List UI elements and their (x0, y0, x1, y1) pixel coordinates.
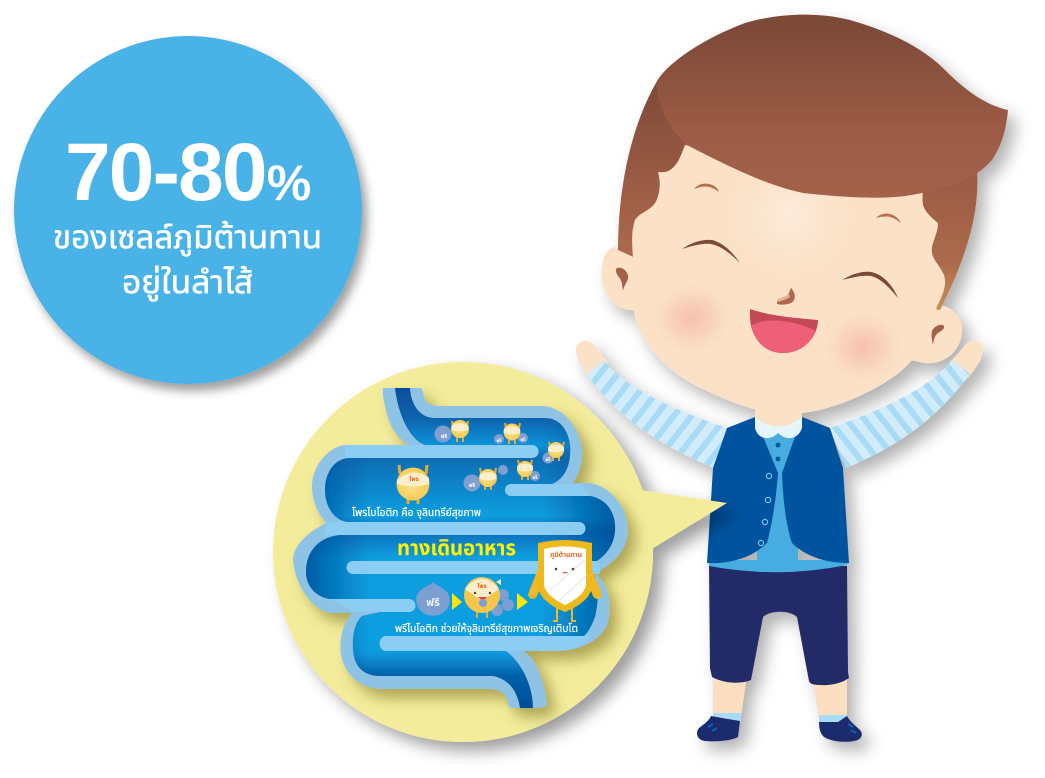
cheeks (650, 280, 905, 385)
shorts (709, 566, 849, 685)
neck (755, 405, 802, 426)
caption: prebiotic: พรีไบโอติก ช่วยให้จุลินทรีย์สุขภาพเจริญเติบโต (395, 622, 578, 635)
probiotic bug small 3 (548, 442, 564, 461)
statistic caption: ของเซลล์ภูมิต้านทาน (53, 219, 322, 257)
prebiotic ball labels: ฟรี (469, 482, 475, 489)
prebiotic ball labels: ฟรี (533, 475, 538, 480)
buttons (758, 473, 772, 546)
eyebrows (694, 184, 901, 223)
ear details (616, 268, 944, 345)
front hair (656, 15, 1008, 198)
large probiotic bug: โพร (409, 477, 419, 483)
collar (755, 417, 802, 438)
probiotic bug small 1 (451, 420, 469, 442)
prebiotic balls (434, 426, 554, 492)
nose (777, 288, 795, 305)
caption: probiotic: โพรไบโอติก คือ จุลินทรีย์สุขภาพ (352, 507, 481, 519)
prebiotic ball labels: ฟรี (497, 438, 502, 443)
immune shield character: ภูมิต้านทาน (550, 551, 582, 559)
probiotic and prebiotic characters, upper rows (396, 420, 564, 504)
prebiotic ball labels: ฟรี (546, 457, 551, 462)
shirt buttons (776, 443, 780, 461)
statistic caption (53, 219, 322, 302)
probiotic bug small 4 (517, 460, 533, 480)
speech bubble (273, 362, 727, 742)
right arm (830, 341, 983, 468)
statistic caption: อยู่ในลำไส้ (122, 264, 253, 302)
probiotic eating prebiotic (464, 577, 514, 618)
large prebiotic ball: ฟรี (426, 597, 440, 609)
probiotic bug small 5 (479, 468, 497, 490)
heading: digestive tract: ทางเดินอาหาร (397, 537, 516, 560)
boy character (576, 15, 1008, 742)
intestine diagram (293, 388, 628, 708)
left shoe (697, 716, 740, 741)
waistcoat (707, 417, 849, 563)
prebiotic ball labels: ฟรี (441, 433, 447, 440)
immune shield character (528, 540, 602, 621)
left arm (576, 341, 727, 468)
arrow (517, 593, 528, 610)
statistic 70-80%: 70-80% (65, 127, 311, 218)
prebiotic ball labels: ฟรี (521, 437, 526, 442)
prebiotic ball labels (441, 433, 551, 489)
probiotic bug small 2 (504, 423, 520, 444)
eyes (682, 240, 898, 298)
large prebiotic ball (416, 582, 450, 616)
large probiotic bug (396, 465, 430, 504)
shirt (709, 430, 847, 572)
back hair (618, 83, 977, 310)
mouth (750, 309, 818, 353)
arrow (452, 593, 462, 610)
right shoe (819, 716, 862, 742)
ears (602, 247, 962, 363)
intestine folds (325, 445, 600, 651)
probiotic eating prebiotic: โพร (477, 584, 487, 590)
blue statistic circle (14, 36, 362, 384)
face (632, 145, 945, 413)
legs (713, 675, 847, 718)
socks (713, 713, 847, 724)
intestine body (293, 388, 628, 708)
